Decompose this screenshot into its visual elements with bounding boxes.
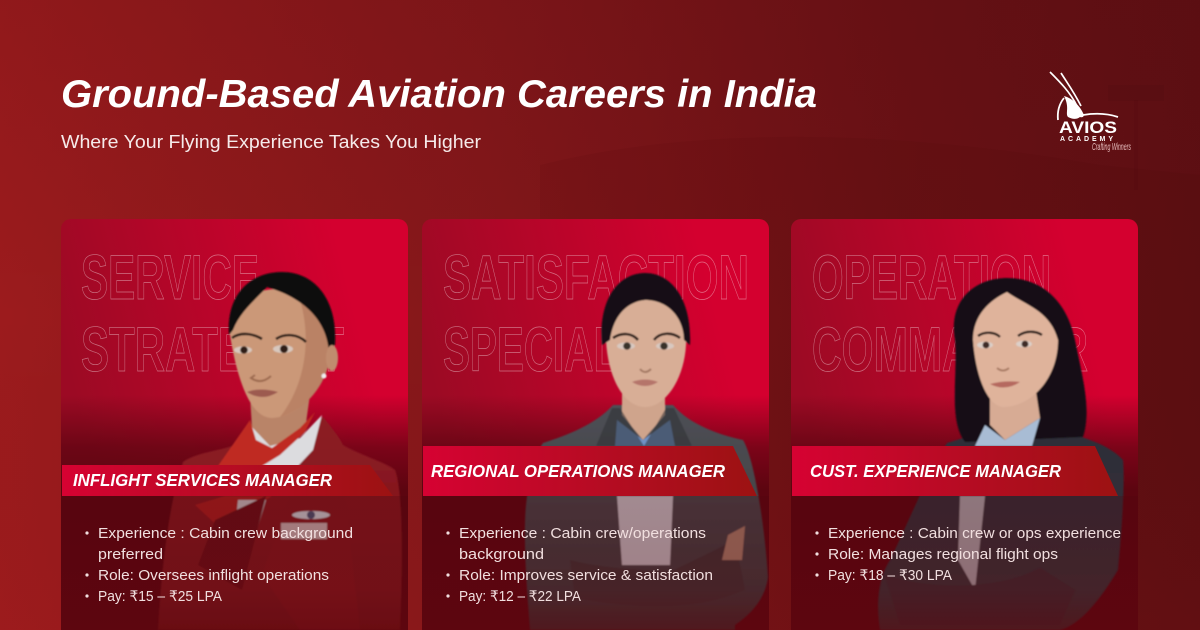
portrait: flight attendant bbox=[158, 272, 402, 630]
details list: Pay: ₹15 – ₹25 LPA bbox=[98, 589, 222, 605]
logo: Avios Academy: AVIOS bbox=[1059, 118, 1117, 137]
panel: Inflight Services Manager bbox=[61, 219, 408, 630]
details list: Role: Manages regional flight ops bbox=[828, 547, 1058, 563]
details list bbox=[446, 526, 713, 605]
outline words: Service Strategist: SERVICE bbox=[81, 243, 259, 313]
details list: preferred bbox=[98, 547, 163, 563]
banner: Cust. Experience Manager: CUST. EXPERIENCE MANAGER bbox=[810, 461, 1061, 481]
details list: Role: Oversees inflight operations bbox=[98, 568, 329, 584]
outline words: Satisfaction Specialist: SPECIALIST bbox=[443, 315, 681, 385]
details list bbox=[815, 526, 1121, 584]
banner: Inflight Services Manager: INFLIGHT SERVICES MANAGER bbox=[73, 470, 332, 490]
logo: Avios Academy: ACADEMY bbox=[1060, 136, 1113, 143]
logo: Avios Academy bbox=[1050, 72, 1131, 153]
outline words: Service Strategist: STRATEGIST bbox=[81, 315, 344, 385]
banner: Regional Operations Manager: REGIONAL OPERATIONS MANAGER bbox=[431, 461, 725, 481]
details list bbox=[85, 526, 353, 605]
banner: Regional Operations Manager bbox=[423, 446, 757, 496]
title: Ground-Based Aviation Careers in India bbox=[61, 73, 817, 116]
portrait: woman in dark suit bbox=[878, 278, 1124, 630]
portrait: woman in grey suit bbox=[525, 273, 768, 630]
details list: Pay: ₹12 – ₹22 LPA bbox=[459, 589, 581, 605]
outline words: Service Strategist bbox=[81, 243, 344, 385]
outline words: Satisfaction Specialist: SATISFACTION bbox=[443, 243, 749, 313]
logo: Avios Academy: Crafting Winners bbox=[1092, 142, 1131, 153]
details list: background bbox=[459, 547, 544, 563]
details list: Experience : Cabin crew/operations bbox=[459, 526, 706, 542]
subtitle: Where Your Flying Experience Takes You Higher bbox=[61, 132, 481, 152]
banner: Inflight Services Manager bbox=[62, 465, 393, 496]
panel: Regional Operations Manager bbox=[422, 219, 769, 630]
banner: Cust. Experience Manager bbox=[792, 446, 1118, 496]
outline words: Operation Commander bbox=[812, 243, 1088, 385]
details list: Role: Improves service & satisfaction bbox=[459, 568, 713, 584]
panel: Customer Experience Manager bbox=[791, 219, 1138, 630]
outline words: Operation Commander: OPERATION bbox=[812, 243, 1051, 313]
details list: Experience : Cabin crew or ops experience bbox=[828, 526, 1121, 542]
outline words: Satisfaction Specialist bbox=[443, 243, 749, 385]
details list: Experience : Cabin crew background bbox=[98, 526, 353, 542]
details list: Pay: ₹18 – ₹30 LPA bbox=[828, 568, 952, 584]
